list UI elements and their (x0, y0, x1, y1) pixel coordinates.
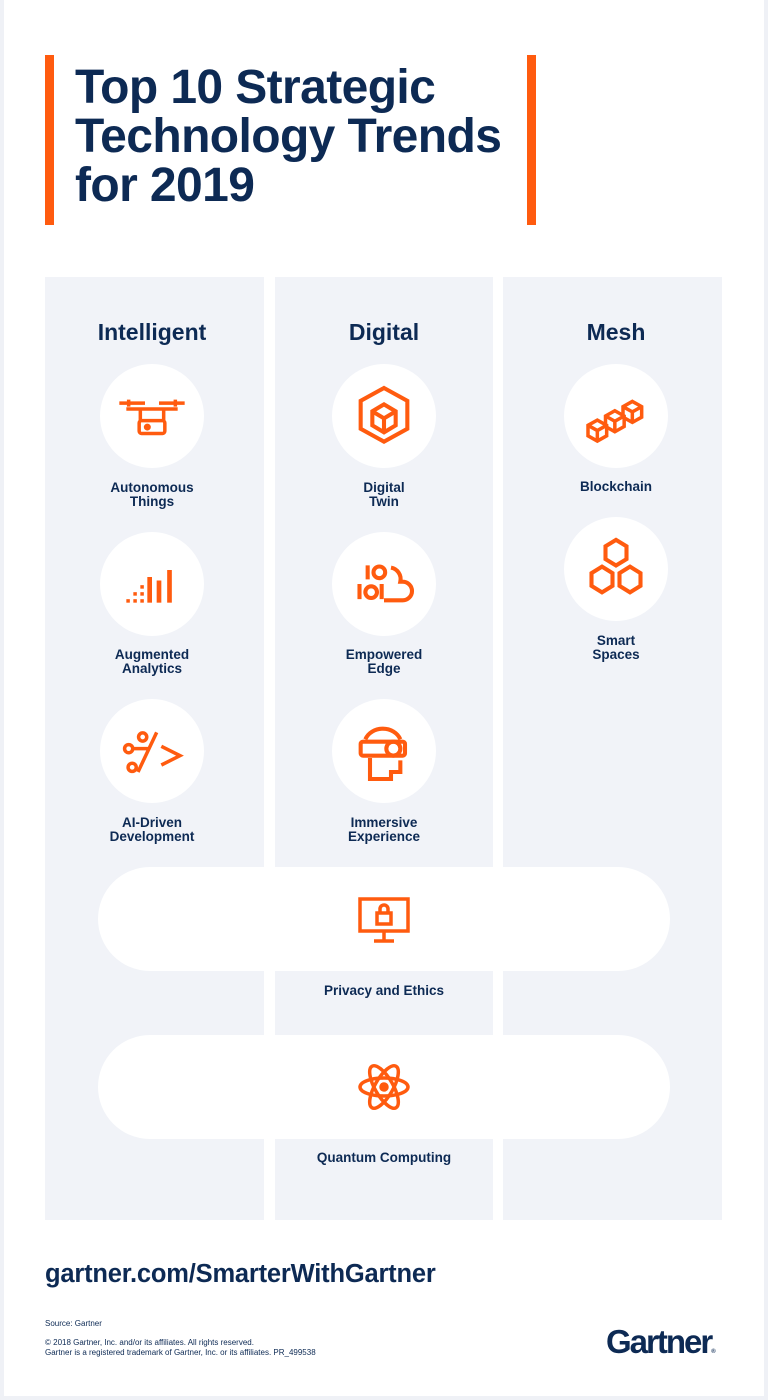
label: Digital Twin (363, 480, 405, 509)
label: Blockchain: Blockchain (580, 479, 652, 494)
source: Source: Gartner (45, 1319, 102, 1328)
url: gartner.com/SmarterWithGartner (45, 1260, 436, 1288)
heading: Mesh: Mesh (587, 319, 645, 345)
label: Augmented Analytics: Augmented (115, 647, 189, 662)
copyright: © 2018 Gartner, Inc. and/or its affiliates. All rights reserved. (45, 1338, 254, 1347)
label: AI-Driven Development (110, 815, 194, 844)
label: Augmented Analytics (115, 647, 189, 676)
icon: analytics (100, 532, 204, 636)
label: Immersive Experience: Immersive (351, 815, 417, 830)
icon: immersive (332, 699, 436, 803)
label: Digital Twin: Twin (369, 494, 399, 509)
label: Immersive Experience (348, 815, 420, 844)
copyright: Gartner is a registered trademark of Gartner, Inc. or its affiliates. PR_499538 (45, 1348, 316, 1357)
pill: privacy (98, 867, 670, 971)
label: Autonomous Things: Things (130, 494, 174, 509)
icon: AI dev (100, 699, 204, 803)
title: Technology Trends (75, 110, 501, 163)
label: Digital Twin: Digital (363, 480, 405, 495)
label: Smart Spaces (592, 633, 640, 662)
panel: digital (275, 277, 493, 1220)
icon: digital twin (332, 364, 436, 468)
label: Empowered Edge (346, 647, 422, 676)
label: Empowered Edge: Edge (367, 661, 400, 676)
title: Top 10 Strategic (75, 61, 435, 114)
panel: intelligent (45, 277, 264, 1220)
pill: quantum (98, 1035, 670, 1139)
label: AI-Driven Development: AI-Driven (122, 815, 182, 830)
label: Autonomous Things: Autonomous (110, 480, 194, 495)
label: Immersive Experience: Experience (348, 829, 420, 844)
label: Empowered Edge: Empowered (346, 647, 422, 662)
heading: Intelligent: Intelligent (98, 319, 206, 345)
label: Smart Spaces: Smart (597, 633, 635, 648)
title (45, 55, 536, 225)
icon: blockchain (564, 364, 668, 468)
label: Augmented Analytics: Analytics (122, 661, 182, 676)
copyright (45, 1338, 316, 1357)
label: Privacy and Ethics: Privacy and Ethics (324, 983, 444, 998)
logo: Gartner® (606, 1323, 714, 1360)
title: for 2019 (75, 159, 254, 212)
label: AI-Driven Development: Development (110, 829, 194, 844)
icon: drone (100, 364, 204, 468)
label: Smart Spaces: Spaces (592, 647, 640, 662)
icon: smart spaces (564, 517, 668, 621)
label: Autonomous Things (110, 480, 194, 509)
label: Quantum Computing: Quantum Computing (317, 1150, 451, 1165)
panel: mesh (503, 277, 722, 1220)
heading: Digital: Digital (349, 319, 419, 345)
icon: empowered edge (332, 532, 436, 636)
